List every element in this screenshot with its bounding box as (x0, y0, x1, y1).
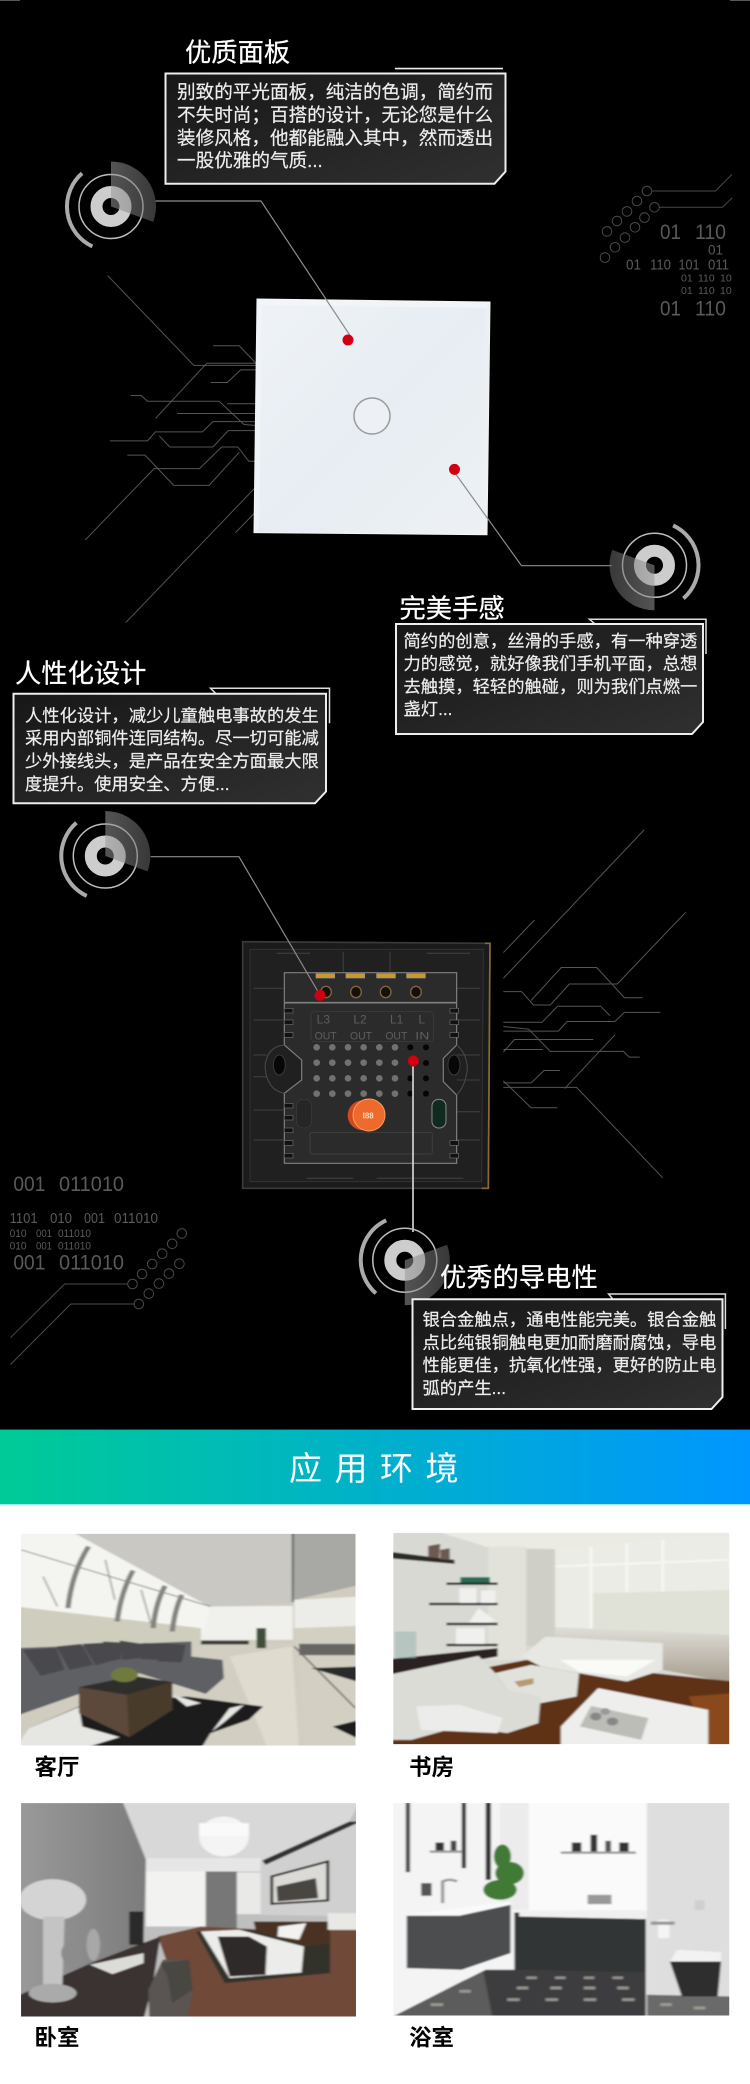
red marker: contacts (408, 1056, 419, 1066)
icon: target dial 4 (361, 1220, 450, 1305)
green LED window (432, 1099, 446, 1128)
front switch panel (254, 299, 490, 535)
text: quality panel description: 一股优雅的气质... (177, 150, 323, 171)
binary decoration: top right: 110 (698, 285, 715, 297)
terminal labels: L2 (353, 1012, 367, 1026)
binary decoration: top right: 01 (660, 221, 681, 244)
callout: perfect feel (396, 594, 706, 734)
label: study: 书房 (409, 1755, 454, 1780)
callout: quality panel (166, 38, 506, 184)
red marker: panel bottom (449, 464, 460, 475)
binary decoration: bottom left: 001 (36, 1228, 52, 1240)
text: human-centred description (25, 705, 319, 794)
binary decoration: top right: 01 (660, 298, 681, 320)
binary decoration: top right: 10 (720, 285, 732, 297)
label: bedroom: 卧室 (34, 2024, 80, 2050)
heading: quality panel: 优质面板 (185, 38, 290, 68)
side notches (284, 1008, 459, 1158)
binary decoration: bottom left: 010 (10, 1228, 27, 1240)
circuit lines: left of front panel (85, 276, 256, 623)
heading: perfect feel: 完美手感 (400, 594, 505, 624)
photo: bedroom (16, 1800, 361, 2020)
binary decoration: top right: 01 (681, 285, 693, 297)
brass contacts (316, 974, 425, 978)
icon: target dial 2 (609, 525, 699, 610)
label: bathroom: 浴室 (409, 2024, 454, 2050)
connector: conductivity (412, 1061, 414, 1232)
binary decoration: bottom left: 1101 (10, 1211, 38, 1227)
text: perfect feel description: 去触摸，轻轻的触碰，则为我们点燃一 (404, 677, 697, 697)
binary decoration: bottom left: 001 (13, 1252, 45, 1274)
binary decoration: bottom left: 001 (36, 1240, 52, 1252)
text: human-centred description: 采用内部铜件连同结构。尽一切可能减 (25, 728, 319, 748)
heading: human-centred design: 人性化设计 (15, 658, 146, 688)
binary decoration: top right: 101 (678, 256, 700, 274)
text: quality panel description: 装修风格，他都能融入其中，然而透出 (177, 127, 493, 148)
binary decoration: top right: 01 (681, 272, 693, 284)
touch button ring (354, 398, 390, 434)
text: conductivity description: 银合金触点，通电性能完美。银合金触 (422, 1310, 716, 1330)
photo: study (389, 1530, 734, 1747)
black feature background (0, 0, 750, 1430)
terminal labels: L1 (390, 1012, 404, 1026)
binary decoration: bottom left: 011010 (58, 1240, 91, 1252)
terminal labels: L (418, 1012, 425, 1026)
text: perfect feel description: 盏灯... (404, 699, 452, 719)
binary decoration: top right: 110 (695, 221, 726, 244)
text: conductivity description: 点比纯银铜触电更加耐磨耐腐蚀，导电 (422, 1332, 716, 1352)
binary decoration: bottom left: 010 (50, 1211, 72, 1227)
text: conductivity description: 性能更佳，抗氧化性强，更好的防止电 (422, 1355, 716, 1375)
connector: quality panel (156, 201, 351, 337)
text: quality panel description: 不失时尚；百搭的设计，无论您是什么 (177, 104, 493, 125)
text: perfect feel description: 力的感觉，就好像我们手机平面，总想 (404, 654, 697, 674)
orange sticker (348, 1100, 378, 1130)
icon: target dial 3 (61, 811, 150, 896)
banner title: 应用环境 (289, 1450, 471, 1487)
rear switch housing: I88 (363, 1111, 374, 1120)
callout: conductivity (412, 1262, 725, 1409)
text: human-centred description: 少外接线头，是产品在安全方面最大限 (25, 751, 319, 771)
connector: human-centred design (151, 857, 320, 995)
binary decoration: top right: 110 (650, 256, 671, 274)
binary decoration: top right: 110 (695, 298, 726, 320)
screw holes (321, 986, 421, 998)
text: perfect feel description: 简约的创意，丝滑的手感，有一种穿透 (404, 631, 697, 651)
connector: perfect feel (455, 473, 612, 566)
text: human-centred description: 人性化设计，减少儿童触电事故的发生 (25, 705, 319, 725)
vent dots (313, 1044, 398, 1097)
rear switch housing (243, 942, 490, 1188)
binary decoration: top right: 01 (626, 256, 641, 274)
terminal labels: OUT (315, 1030, 337, 1042)
mounting ears (265, 1045, 467, 1095)
binary decoration: bottom left: 001 (13, 1173, 45, 1196)
photo: living room (16, 1531, 360, 1749)
text: conductivity description: 弧的产生... (422, 1378, 506, 1398)
heading: conductivity: 优秀的导电性 (440, 1262, 598, 1292)
binary decoration: top right (600, 174, 732, 320)
text: quality panel description (177, 82, 493, 171)
binary decoration: bottom left: 011010 (59, 1173, 124, 1196)
binary decoration: top right: 01 (708, 242, 723, 258)
label: living room: 客厅 (34, 1754, 80, 1780)
terminal labels: OUT (385, 1030, 407, 1042)
binary decoration: top right: 10 (720, 272, 732, 284)
circuit lines: right of rear panel (503, 830, 686, 1178)
white lower section (0, 1504, 750, 2084)
photo: bathroom (389, 1800, 734, 2020)
red marker: panel top (342, 334, 354, 346)
banner: application environments (0, 1430, 750, 1505)
text: human-centred description: 度提升。使用安全、方便... (25, 774, 230, 794)
terminal labels: IN (415, 1030, 429, 1042)
text: perfect feel description (404, 631, 697, 719)
binary decoration: bottom left: 011010 (58, 1228, 91, 1240)
binary decoration: bottom left: 001 (84, 1211, 105, 1227)
text: conductivity description (422, 1310, 716, 1398)
terminal module (284, 973, 457, 1163)
binary decoration: bottom left: 010 (10, 1240, 27, 1252)
red marker: terminal (314, 990, 326, 1001)
binary decoration: bottom left: 011010 (114, 1211, 158, 1227)
terminal labels: OUT (350, 1030, 372, 1042)
binary decoration: bottom left (10, 1173, 187, 1364)
icon: target dial 1 (67, 162, 156, 246)
binary decoration: top right: 110 (698, 272, 715, 284)
terminal labels (311, 1012, 433, 1042)
text: quality panel description: 别致的平光面板，纯洁的色调，简约而 (177, 82, 493, 102)
binary decoration: bottom left: 011010 (59, 1252, 124, 1274)
terminal labels: L3 (317, 1012, 330, 1026)
binary decoration: top right: 011 (708, 256, 729, 274)
callout: human-centred design (14, 658, 330, 803)
